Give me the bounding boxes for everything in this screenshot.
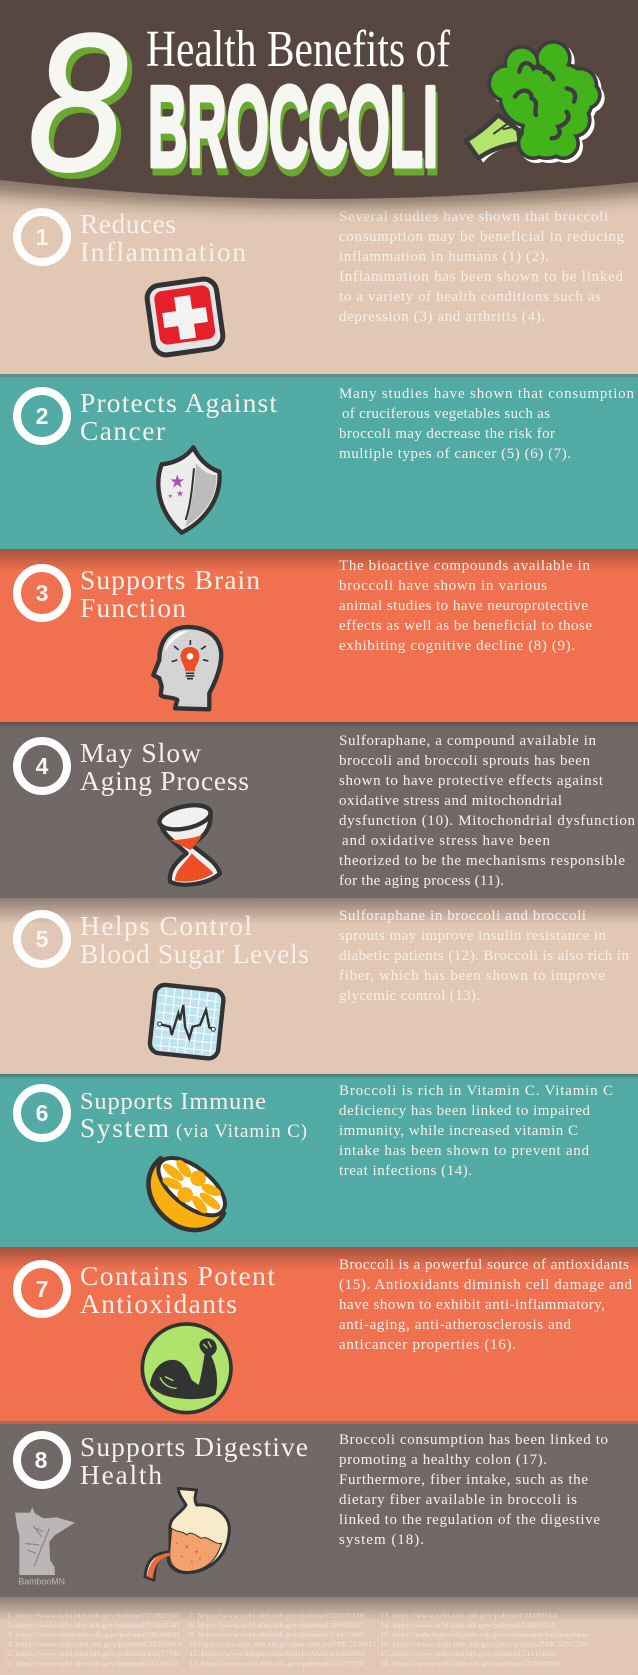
text: digestive: promoting a healthy colon (17). bbox=[339, 1452, 547, 1468]
number badge 4 bbox=[17, 741, 67, 791]
text: cancer: Many studies have shown that consumption bbox=[339, 386, 634, 402]
references column 1: 1. https://www.ncbi.nlm.nih.gov/pubmed/15992556 bbox=[7, 1611, 179, 1620]
text: brain: exhibiting cognitive decline (8) (9). bbox=[339, 638, 575, 654]
references column 2: 11. https://www.karger.com/Article/Abstract/358601 bbox=[189, 1649, 366, 1658]
text: blood sugar: fiber, which has been shown to improve bbox=[339, 968, 605, 984]
heading: may slow aging process: Aging Process bbox=[80, 765, 249, 796]
number badge 1: 1 bbox=[36, 224, 49, 250]
heading: protects against cancer: Protects Against bbox=[80, 387, 277, 418]
references column 3: 16. https://www.ncbi.nlm.nih.gov/pmc/articles/PMC5297730/ bbox=[380, 1640, 591, 1649]
heading: supports digestive health: Supports Digestive bbox=[80, 1431, 308, 1462]
references column 2 bbox=[189, 1611, 376, 1668]
title line: health benefits of: Health Benefits of bbox=[146, 21, 451, 78]
text: aging: broccoli and broccoli sprouts has been bbox=[339, 753, 590, 769]
text: aging bbox=[339, 733, 636, 889]
text: immune: treat infections (14). bbox=[339, 1163, 472, 1179]
text: brain bbox=[339, 558, 592, 654]
icon: head with light bulb bbox=[153, 627, 221, 709]
text: cancer: broccoli may decrease the risk for bbox=[339, 426, 555, 442]
text: cancer: of cruciferous vegetables such as bbox=[342, 406, 550, 422]
text: brain: The bioactive compounds available in bbox=[339, 558, 590, 574]
text: aging: shown to have protective effects against bbox=[339, 773, 604, 789]
text: digestive: system (18). bbox=[339, 1532, 424, 1548]
heading: supports digestive health: Health bbox=[80, 1459, 162, 1490]
heading: reduces inflammation: Inflammation bbox=[80, 236, 246, 267]
icon: broccoli bbox=[466, 40, 605, 163]
text: aging: theorized to be the mechanisms responsible bbox=[339, 853, 625, 869]
title numeral 8: 8 bbox=[24, 0, 131, 212]
text: antioxidants: have shown to exhibit anti-inflammatory, bbox=[339, 1297, 605, 1313]
heading: supports brain function bbox=[80, 564, 260, 623]
heading: supports immune system: System bbox=[80, 1112, 169, 1143]
heading: supports immune system: Supports Immune bbox=[80, 1088, 266, 1115]
title word: broccoli bbox=[148, 64, 440, 198]
icon: orange half bbox=[148, 1147, 235, 1230]
references column 1: 4. https://www.ncbi.nlm.nih.gov/pubmed/30366664 bbox=[7, 1640, 182, 1649]
number badge 1 bbox=[17, 212, 67, 262]
title numeral 8: 8 bbox=[29, 0, 136, 218]
panel: supports immune system bbox=[0, 1074, 638, 1247]
references column 2: 8. https://www.ncbi.nlm.nih.gov/pubmed/28969607 bbox=[189, 1620, 364, 1630]
text: blood sugar bbox=[339, 908, 630, 1004]
icon: red cross bbox=[145, 277, 225, 357]
number badge 4: 4 bbox=[36, 753, 49, 779]
references column 1 bbox=[7, 1611, 182, 1668]
text: aging: and oxidative stress have been bbox=[342, 833, 550, 849]
text: inflammation: consumption may be beneficial in reducing bbox=[339, 229, 624, 245]
icon: stomach bbox=[145, 1488, 229, 1580]
logo: BambooMN: BambooMN bbox=[18, 1577, 65, 1587]
text: immune: Broccoli is rich in Vitamin C. Vitamin C bbox=[339, 1083, 613, 1099]
number badge 5 bbox=[17, 914, 67, 964]
heading: may slow aging process: May Slow bbox=[80, 737, 201, 768]
text: inflammation: inflammation in humans (1) (2). bbox=[339, 249, 549, 265]
number badge 6 bbox=[17, 1088, 67, 1138]
panel: supports brain function bbox=[0, 549, 638, 722]
number badge 2: 2 bbox=[36, 403, 48, 429]
number badge 8: 8 bbox=[35, 1447, 48, 1473]
heading: supports immune system bbox=[80, 1088, 307, 1143]
text: digestive bbox=[339, 1432, 608, 1548]
heading: helps control blood sugar levels: Helps Control bbox=[80, 910, 252, 941]
references column 3: 14. https://www.ncbi.nlm.nih.gov/pubmed/24099763 bbox=[380, 1620, 555, 1630]
references column 3: 18. https://www.ncbi.nlm.nih.gov/pubmed/22840869 bbox=[380, 1659, 560, 1668]
text: digestive: Furthermore, fiber intake, such as the bbox=[339, 1472, 588, 1488]
heading: contains potent antioxidants: Contains Potent bbox=[80, 1260, 275, 1291]
text: aging: oxidative stress and mitochondrial bbox=[339, 793, 562, 809]
references column 1: 5. https://www.ncbi.nlm.nih.gov/pubmed/22877795 bbox=[7, 1649, 181, 1658]
number badge 6: 6 bbox=[36, 1100, 48, 1126]
icon: hourglass bbox=[157, 801, 220, 885]
references column 1: 2. https://www.ncbi.nlm.nih.gov/pubmed/25984540 bbox=[7, 1620, 179, 1630]
heading: contains potent antioxidants bbox=[80, 1260, 275, 1319]
text: blood sugar: glycemic control (13). bbox=[339, 988, 480, 1004]
number badge 5: 5 bbox=[36, 926, 49, 952]
number badge 3: 3 bbox=[36, 580, 48, 606]
text: cancer: multiple types of cancer (5) (6) (7). bbox=[339, 446, 571, 462]
icon: shield bbox=[158, 447, 220, 533]
number badge 8 bbox=[17, 1435, 67, 1485]
number badge 7 bbox=[17, 1264, 67, 1314]
text: cancer bbox=[339, 386, 634, 462]
references column 2: 7. https://www.ncbi.nlm.nih.gov/pubmed/22679348 bbox=[189, 1611, 364, 1620]
text: blood sugar: sprouts may improve insulin resistance in bbox=[339, 928, 606, 944]
references column 3: 17. https://www.ncbi.nlm.nih.gov/pubmed/21115065 bbox=[380, 1649, 555, 1658]
text: immune bbox=[339, 1083, 613, 1179]
heading: protects against cancer: Cancer bbox=[80, 415, 165, 446]
text: inflammation: to a variety of health conditions such as bbox=[339, 289, 601, 305]
icon: glucose graph bbox=[149, 984, 224, 1059]
text: aging: dysfunction (10). Mitochondrial dysfunction bbox=[339, 813, 636, 829]
text: immune: intake has been shown to prevent and bbox=[339, 1143, 590, 1159]
references column 3: 15. https://pubchem.ncbi.nlm.nih.gov/compound/sulforaphane bbox=[380, 1630, 589, 1639]
heading: protects against cancer bbox=[80, 387, 277, 446]
references column 2: 12. https://www.ncbi.nlm.nih.gov/pubmed/21537970 bbox=[189, 1659, 364, 1668]
text: aging: for the aging process (11). bbox=[339, 873, 504, 889]
text: brain: effects as well as be beneficial to those bbox=[339, 618, 592, 634]
text: antioxidants: anti-aging, anti-atherosclerosis and bbox=[339, 1317, 572, 1333]
heading: supports brain function: Supports Brain bbox=[80, 564, 260, 595]
panel: protects against cancer bbox=[0, 374, 638, 549]
text: brain: broccoli have shown in various bbox=[339, 578, 547, 594]
text: immune: deficiency has been linked to impaired bbox=[339, 1103, 590, 1119]
heading: reduces inflammation: Reduces bbox=[80, 208, 176, 239]
heading: supports immune system: (via Vitamin C) bbox=[176, 1121, 307, 1142]
text: inflammation: Inflammation has been shown to be linked bbox=[339, 269, 624, 285]
text: antioxidants bbox=[339, 1257, 632, 1353]
number badge 3 bbox=[17, 568, 67, 618]
heading: helps control blood sugar levels: Blood Sugar Levels bbox=[80, 938, 309, 969]
panel: reduces inflammation bbox=[0, 150, 638, 375]
number badge 2 bbox=[17, 391, 67, 441]
number badge 7: 7 bbox=[36, 1276, 48, 1302]
heading: helps control blood sugar levels bbox=[80, 910, 309, 969]
text: inflammation: depression (3) and arthritis (4). bbox=[339, 309, 545, 325]
text: inflammation bbox=[339, 209, 624, 325]
heading: supports brain function: Function bbox=[80, 592, 186, 623]
text: antioxidants: anticancer properties (16). bbox=[339, 1337, 516, 1353]
text: digestive: linked to the regulation of the digestive bbox=[339, 1512, 600, 1528]
panel: supports digestive health bbox=[0, 1421, 638, 1597]
text: brain: animal studies to have neuroprotective bbox=[339, 598, 588, 614]
panel: may slow aging process bbox=[0, 722, 638, 898]
icon: flexed arm bbox=[142, 1324, 231, 1413]
panel: helps control blood sugar levels bbox=[0, 898, 638, 1074]
text: aging: Sulforaphane, a compound available in bbox=[339, 733, 596, 749]
heading: may slow aging process bbox=[80, 737, 249, 796]
heading: reduces inflammation bbox=[80, 208, 246, 267]
references column 2: 9. https://www.ncbi.nlm.nih.gov/pubmed/23437066 bbox=[189, 1630, 364, 1639]
heading: supports digestive health bbox=[80, 1431, 308, 1490]
references column 3 bbox=[380, 1611, 591, 1668]
references column 2: 10.https://www.ncbi.nlm.nih.gov/pmc/articles/PMC5136611 bbox=[189, 1640, 376, 1649]
references column 1: 3. https://www.ncbi.nlm.nih.gov/pubmed/9039430 bbox=[7, 1630, 179, 1639]
logo: BambooMN bbox=[15, 1507, 75, 1587]
text: blood sugar: Sulforaphane in broccoli and broccoli bbox=[339, 908, 586, 924]
text: immune: immunity, while increased vitamin C bbox=[339, 1123, 578, 1139]
panel: contains potent antioxidants bbox=[0, 1247, 638, 1421]
text: digestive: Broccoli consumption has been linked to bbox=[339, 1432, 608, 1448]
header banner bbox=[0, 0, 638, 218]
text: antioxidants: (15). Antioxidants diminish cell damage and bbox=[339, 1277, 632, 1293]
text: blood sugar: diabetic patients (12). Broccoli is also rich in bbox=[339, 948, 630, 964]
references column 3: 13. https://www.ncbi.nlm.nih.gov/pubmed/24180564 bbox=[380, 1611, 557, 1620]
heading: contains potent antioxidants: Antioxidants bbox=[80, 1288, 237, 1319]
panel: references bbox=[0, 1597, 638, 1675]
text: digestive: dietary fiber available in broccoli is bbox=[339, 1492, 577, 1508]
references column 1: 6. https://www.ncbi.nlm.nih.gov/pubmed/21118631 bbox=[7, 1659, 179, 1668]
text: inflammation: Several studies have shown that broccoli bbox=[339, 209, 608, 225]
text: antioxidants: Broccoli is a powerful source of antioxidants bbox=[339, 1257, 629, 1273]
